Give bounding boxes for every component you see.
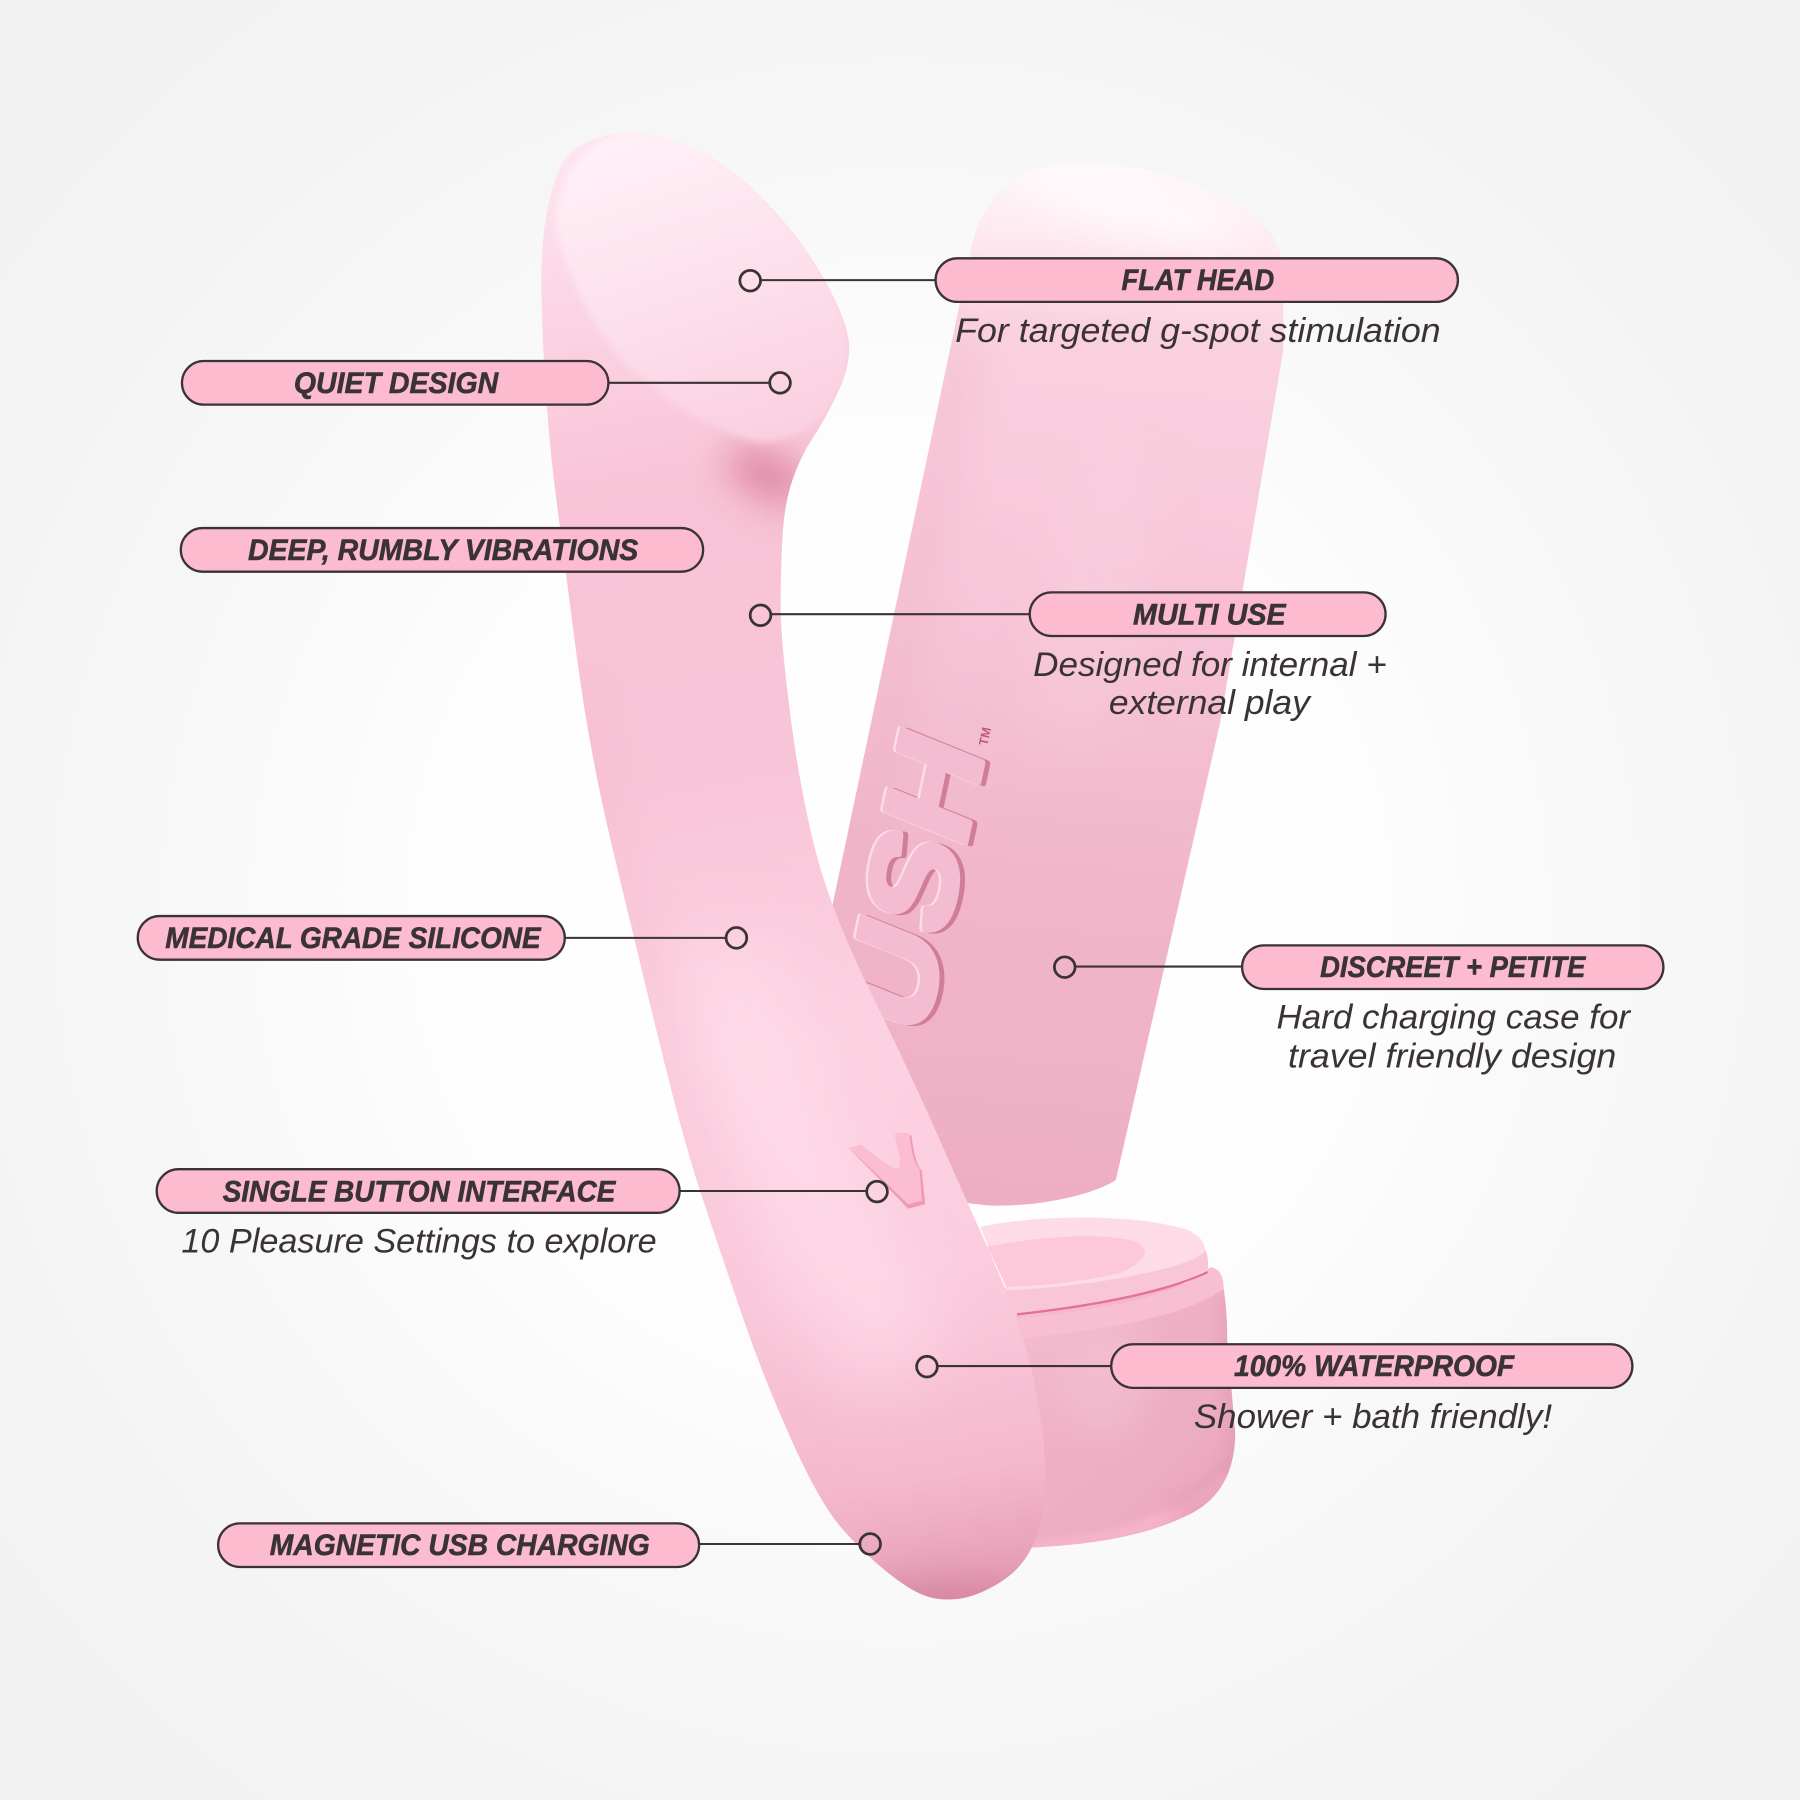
callout: single button interface: SINGLE BUTTON INTERFACE [223, 1175, 616, 1208]
callout: medical grade silicone: MEDICAL GRADE SILICONE [165, 922, 542, 955]
callout: single button interface: 10 Pleasure Settings to explore [181, 1222, 657, 1260]
product: curved device [542, 133, 1044, 1600]
product: charging case tube [832, 162, 1284, 1206]
cup flange [996, 1249, 1208, 1316]
callout: quiet design [182, 361, 790, 405]
embossed brand logo: PUSH [804, 712, 1014, 1141]
callout: deep rumbly vibrations: DEEP, RUMBLY VIBRATIONS [248, 534, 638, 567]
cup opening [987, 1236, 1145, 1287]
callout: multi use: Designed for internal + [1033, 646, 1387, 684]
callout: discreet and petite [1054, 945, 1663, 1076]
embossed brand logo [853, 726, 991, 1026]
callout: deep rumbly vibrations [181, 528, 703, 572]
callout: flat head [740, 258, 1458, 350]
single button logo [848, 1133, 925, 1209]
callout: waterproof: 100% WATERPROOF [1234, 1350, 1515, 1383]
product: charging base cup [976, 1218, 1240, 1550]
callout: multi use: MULTI USE [1133, 598, 1287, 631]
flat head face [556, 131, 849, 442]
callout: single button interface [157, 1169, 887, 1260]
callout: discreet and petite: Hard charging case for [1277, 999, 1632, 1037]
embossed brand logo: TM [976, 726, 994, 747]
callout: flat head: For targeted g-spot stimulation [955, 312, 1441, 350]
callout: magnetic usb charging: MAGNETIC USB CHARGING [270, 1529, 650, 1562]
callout: discreet and petite: DISCREET + PETITE [1320, 951, 1586, 984]
callout: waterproof: Shower + bath friendly! [1194, 1398, 1552, 1436]
callout: flat head: FLAT HEAD [1122, 264, 1274, 297]
callout: discreet and petite: travel friendly design [1288, 1038, 1616, 1076]
embossed brand logo: PUSH [797, 710, 1007, 1139]
callout: magnetic usb charging [218, 1523, 880, 1567]
callout: multi use: external play [1109, 684, 1312, 722]
callout: waterproof [917, 1344, 1632, 1436]
callout: quiet design: QUIET DESIGN [294, 367, 500, 400]
embossed brand logo: PUSH [799, 711, 1010, 1140]
callout: medical grade silicone [138, 916, 747, 960]
callout: multi use [750, 592, 1387, 722]
cup shoulder [999, 1267, 1224, 1339]
cup rim top [980, 1218, 1205, 1290]
